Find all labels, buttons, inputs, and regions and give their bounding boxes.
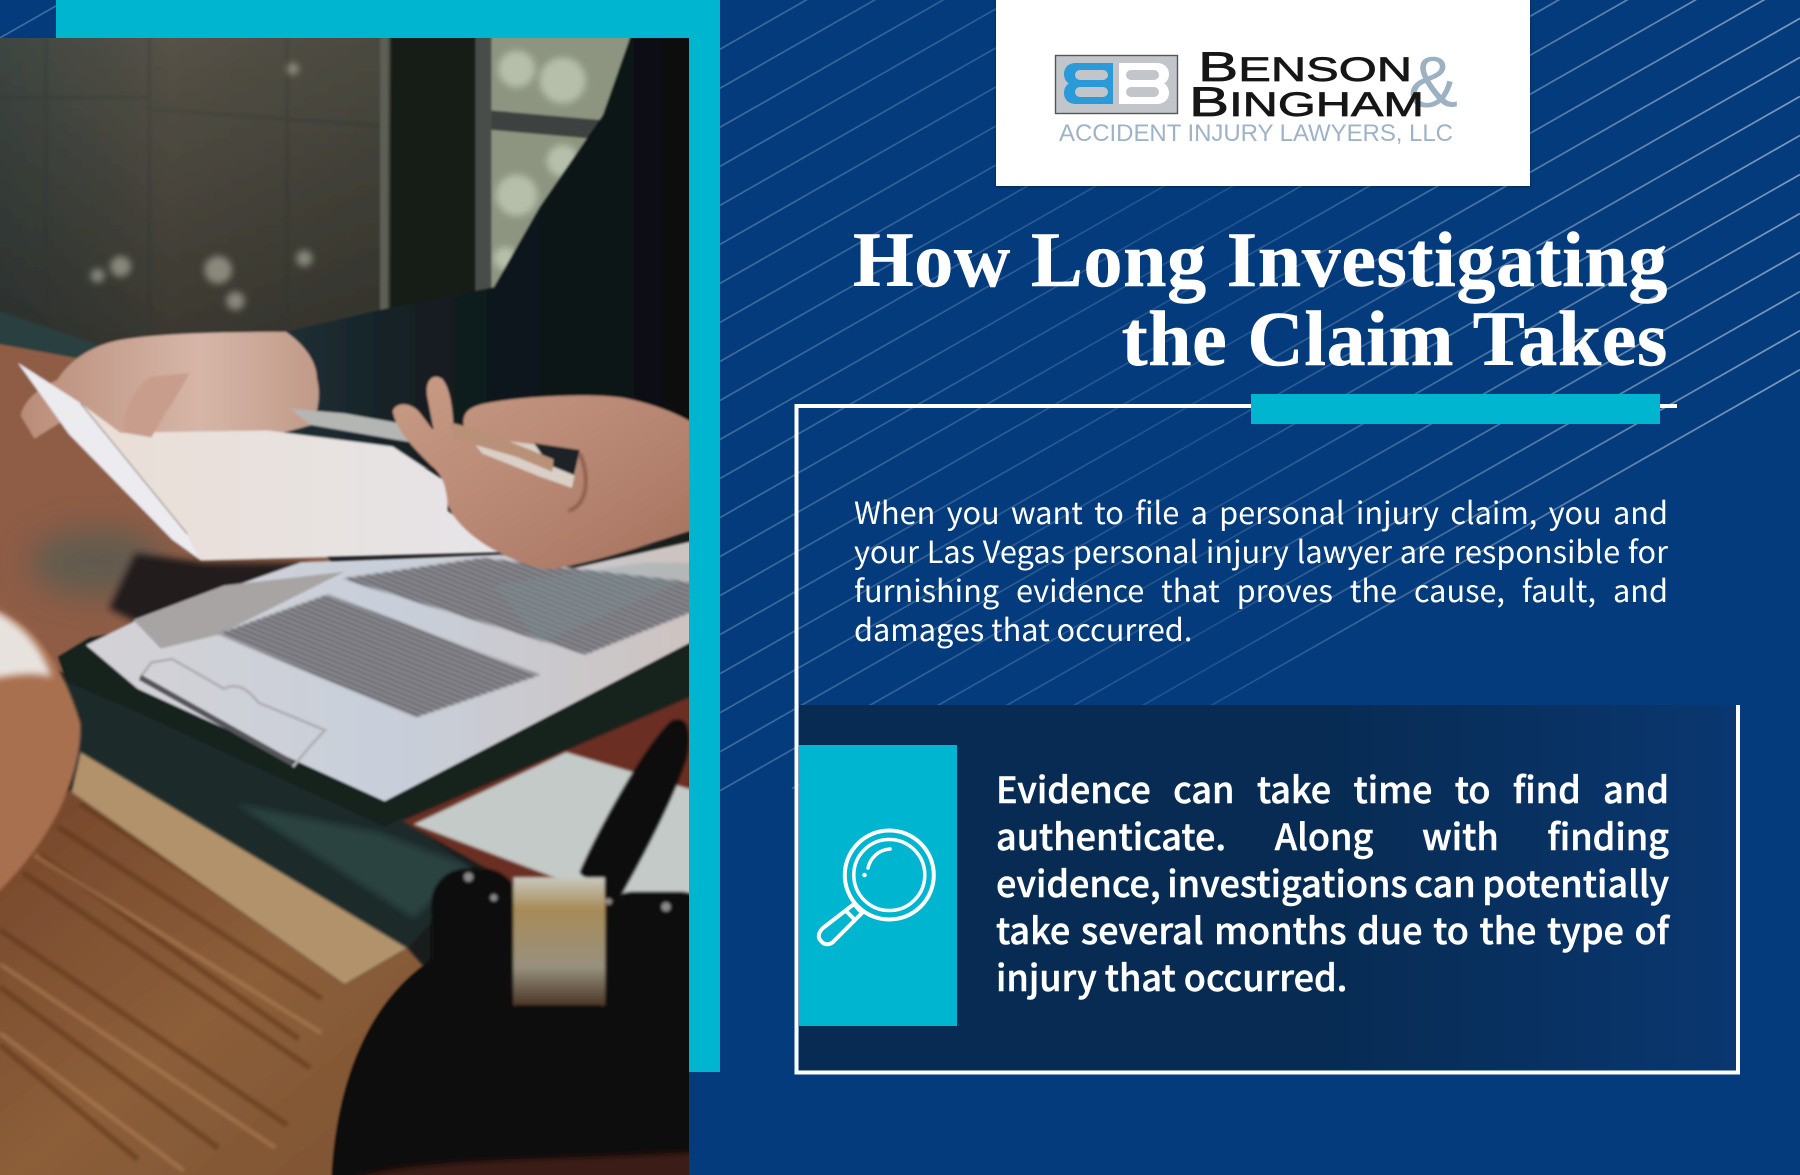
pale wood edge [71, 752, 408, 985]
firm name: B INGHAM [1189, 78, 1424, 125]
intro text block: your Las Vegas personal injury lawyer are responsible for [854, 527, 1668, 572]
gavel base [330, 960, 689, 1175]
callout text: Evidence can take time to find and [996, 762, 1669, 814]
intro text block: damages that occurred. [854, 605, 1192, 650]
callout text: evidence, investigations can potentially [996, 856, 1669, 908]
logo mark BB [1056, 56, 1178, 114]
desk wood behind envelope [0, 342, 333, 677]
icon: magnifying glass [816, 828, 936, 946]
logo: Benson & Bingham wordmark [1054, 43, 1458, 147]
right hand [393, 377, 700, 569]
dark desk edge [57, 677, 477, 948]
callout panel [799, 705, 1736, 1070]
text blocks on document [218, 558, 700, 717]
pen [292, 408, 435, 444]
window with foliage [379, 38, 632, 311]
left hand [21, 332, 319, 442]
firm name [1189, 43, 1424, 125]
photo: lawyer handing envelope with clipboard and gavel on desk [0, 38, 689, 1175]
heading: the Claim Takes [1122, 295, 1668, 382]
cyan frame behind photo [56, 0, 720, 1072]
firm name: B ENSON [1198, 43, 1412, 90]
callout text: authenticate. Along with finding [996, 809, 1669, 861]
gavel handle [580, 720, 689, 907]
ampersand: & [1408, 43, 1458, 123]
intro text block: furnishing evidence that proves the cause, fault, and [854, 566, 1668, 611]
callout text: injury that occurred. [996, 950, 1347, 1002]
envelope [18, 363, 502, 560]
callout text: take several months due to the type of [996, 903, 1669, 955]
clipboard base [57, 540, 700, 829]
thumb on envelope [124, 373, 189, 437]
logo panel [996, 0, 1530, 186]
blurred wall and blinds [0, 38, 392, 346]
icon panel [799, 745, 957, 1026]
wood table with grain [0, 789, 426, 1175]
ledge under window [0, 312, 98, 358]
tagline: ACCIDENT INJURY LAWYERS, LLC [1059, 120, 1453, 147]
intro text block: When you want to file a personal injury claim, you and [854, 488, 1668, 533]
gap between thumb and palm [475, 440, 577, 489]
red wood and mat on far desk [402, 692, 700, 918]
fist at left edge [0, 608, 81, 901]
metal clip [140, 659, 325, 767]
heading: How Long Investigating [853, 216, 1668, 303]
documents on clipboard [86, 540, 700, 801]
dark suit sleeve [276, 27, 700, 482]
intro text block [854, 488, 1668, 650]
callout text [996, 762, 1670, 1002]
gavel head [430, 867, 689, 1008]
heading [853, 216, 1668, 382]
heading accent bar [1251, 394, 1660, 424]
pen tip [450, 423, 553, 472]
